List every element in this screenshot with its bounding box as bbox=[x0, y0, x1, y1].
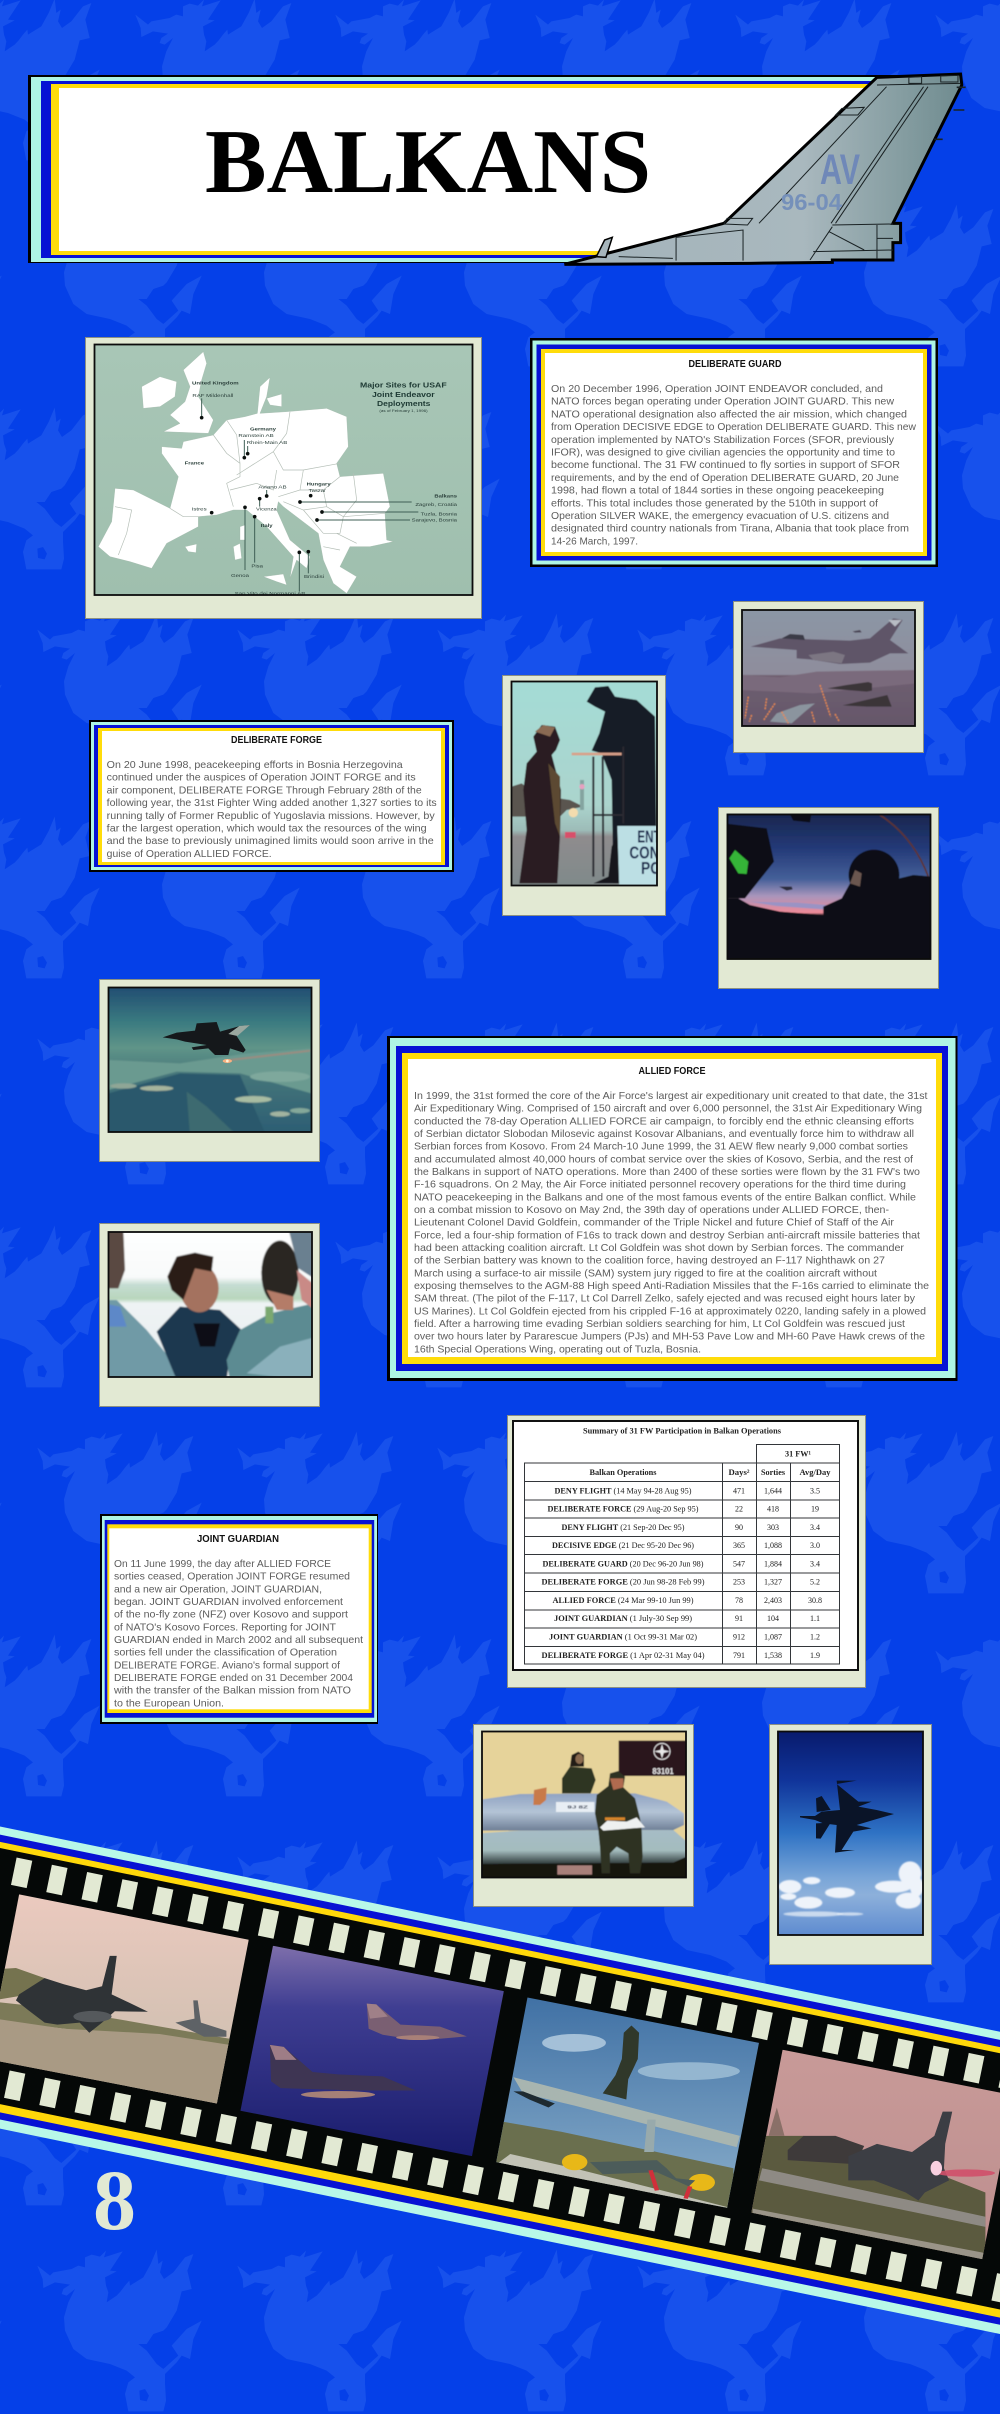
photo card: map of major USAF sites: Germany bbox=[250, 427, 276, 433]
text block: Deliberate Guard body: efforts. This total includes those generated by the 510th in support of bbox=[551, 498, 878, 509]
photo card: map of major USAF sites: Hungary bbox=[307, 481, 331, 487]
text block: Joint Guardian body: of the no-fly zone (NFZ) over Kosovo and support bbox=[114, 1610, 348, 1621]
text block: Deliberate Forge body: continued under the auspices of Operation JOINT FORGE and its bbox=[107, 773, 416, 784]
photo card: F-16 over clouds bbox=[770, 1724, 932, 1964]
table rows: 30.8 bbox=[808, 1596, 822, 1605]
table rows: 912 bbox=[733, 1632, 745, 1641]
table rows: 791 bbox=[733, 1651, 745, 1660]
text block: Deliberate Guard body: requirements, and by the end of Operation DELIBERATE GUARD, 20 June bbox=[551, 473, 899, 484]
text block: Deliberate Forge body: far the largest operation, which would tax the resources of the wing bbox=[107, 824, 427, 834]
text block: Deliberate Guard body: On 20 December 1996, Operation JOINT ENDEAVOR concluded, and bbox=[551, 384, 883, 395]
text block: Joint Guardian body: On 11 June 1999, the day after ALLIED FORCE bbox=[114, 1559, 331, 1570]
table rows: DECISIVE EDGE (21 Dec 95-20 Dec 96) bbox=[552, 1541, 694, 1550]
text block: Allied Force body: March using a surface-to air missile (SAM) system jury rigged to fire at the coalition aircraft without bbox=[414, 1268, 877, 1279]
table rows: 471 bbox=[733, 1486, 745, 1495]
table header: Sorties bbox=[761, 1468, 785, 1477]
table rows bbox=[542, 1486, 822, 1660]
table rows: 418 bbox=[767, 1505, 779, 1514]
film frames bbox=[0, 1889, 1000, 2265]
photo card: map of major USAF sites: Istres bbox=[192, 506, 207, 512]
table rows: JOINT GUARDIAN (1 Oct 99-31 Mar 02) bbox=[549, 1632, 697, 1641]
text block: Allied Force body: 16th Special Operations Wing, operating out of Tuzla, Bosnia. bbox=[414, 1344, 701, 1355]
table rows: 3.4 bbox=[810, 1523, 820, 1532]
text block: Deliberate Guard body: NATO operational designation also affected the air mission, which changed bbox=[551, 409, 907, 420]
text block: Allied Force body bbox=[414, 1091, 929, 1355]
table rows: 1,644 bbox=[764, 1486, 782, 1495]
table rows: DELIBERATE FORGE (1 Apr 02-31 May 04) bbox=[542, 1651, 705, 1660]
text block: Allied Force body: Serbian forces from Kosovo. From 24 March-10 June 1999, the 31 AEW flew nearly 9,000 combat sorties bbox=[414, 1142, 908, 1153]
table rows: 547 bbox=[733, 1559, 745, 1568]
table rows: 1.9 bbox=[810, 1651, 820, 1660]
text block: Allied Force body: over two hours later by Pararescue Jumpers (PJs) and MH-53 Pave Low and MH-60 Pave Hawk crews of the bbox=[414, 1332, 925, 1343]
text block: Allied Force body: In 1999, the 31st formed the core of the Air Force's largest air expeditionary unit created to that date, the 31st bbox=[414, 1091, 928, 1102]
table rows: 91 bbox=[735, 1614, 743, 1623]
text block: Deliberate Guard body: designated third country nationals from Tirana, Albania that took place from bbox=[551, 524, 909, 535]
title banner bbox=[28, 75, 898, 263]
photo card: map of major USAF sites: Taszar bbox=[309, 488, 326, 494]
film frame: crew on wing with missiles bbox=[491, 1994, 765, 2213]
table rows: DELIBERATE GUARD (20 Dec 96-20 Jun 98) bbox=[542, 1559, 704, 1568]
table header bbox=[590, 1450, 830, 1477]
photo card: soldiers on fuel tanks bbox=[474, 1724, 694, 1906]
table rows: 2,403 bbox=[764, 1596, 782, 1605]
text block: Allied Force body: field. After a harrowing time evading Serbian soldiers searching for him, Lt Col Goldfein was rescued just bbox=[414, 1319, 905, 1330]
table rows: 3.4 bbox=[810, 1559, 820, 1568]
film frame: F-16 taking off with afterburner bbox=[746, 2047, 1000, 2265]
photo card: map of major USAF sites: Italy bbox=[261, 523, 273, 529]
text block: Joint Guardian body: with the transfer of the Balkan mission from NATO bbox=[113, 1686, 351, 1697]
text block: Allied Force body: had been attacking coalition aircraft. Lt Col Goldfein was shot down by Serbian forces. The commander bbox=[414, 1243, 905, 1254]
photo card: map of major USAF sites: Pisa bbox=[251, 563, 263, 569]
photo card: map of major USAF sites: Balkans bbox=[434, 493, 457, 499]
icon: F-16 tail fin: 96-04 bbox=[781, 189, 842, 215]
table rows: 1.2 bbox=[810, 1632, 820, 1641]
film frame: two F-16s in flight bbox=[236, 1942, 510, 2160]
table rows: 3.0 bbox=[810, 1541, 820, 1550]
film frame: F-16 on the ramp bbox=[0, 1889, 255, 2108]
table rows: 1,087 bbox=[764, 1632, 782, 1641]
text block: Allied Force body: Lieutenant Colonel David Goldfein, commander of the Triple Nickel and future Chief of Staff of the Air bbox=[414, 1218, 895, 1229]
text block: Joint Guardian body: to the European Union. bbox=[114, 1698, 224, 1709]
table rows: 19 bbox=[811, 1505, 819, 1514]
page number: 8 bbox=[93, 2152, 136, 2248]
table header: 31 FW¹ bbox=[785, 1450, 812, 1458]
icon: F-16 tail fin bbox=[564, 74, 966, 264]
text block: Allied Force body: Air Expeditionary Wing. Comprised of 150 aircraft and over 6,000 personnel, the 31st Air Expeditionary Wing bbox=[414, 1104, 922, 1115]
text block: Deliberate Forge body: guise of Operation ALLIED FORCE. bbox=[107, 849, 272, 860]
photo card: map of major USAF sites: Rhein-Main AB bbox=[247, 440, 288, 446]
heading: Deliberate Forge: DELIBERATE FORGE bbox=[231, 734, 322, 746]
photo card: map of major USAF sites: Sarajevo, Bosnia bbox=[412, 518, 457, 524]
photo card: soldiers on fuel tanks: 9J 8Z bbox=[567, 1805, 588, 1811]
photo card: crew at the stand: PO bbox=[641, 858, 661, 878]
text block: Deliberate Guard body: operation implemented by NATO's Stabilization Forces (SFOR, previously bbox=[551, 435, 895, 446]
table rows: 3.5 bbox=[810, 1486, 820, 1495]
panel: Deliberate Forge bbox=[89, 720, 454, 872]
table rows: DELIBERATE FORGE (20 Jun 98-28 Feb 99) bbox=[542, 1578, 705, 1587]
text block: Deliberate Guard body: NATO forces began operating under Operation JOINT GUARD. This new bbox=[551, 397, 895, 408]
table rows: 104 bbox=[767, 1614, 779, 1623]
panel: Deliberate Guard bbox=[530, 338, 938, 567]
table rows: 22 bbox=[735, 1505, 743, 1514]
photo card: map of major USAF sites: Vicenza bbox=[256, 507, 277, 513]
table rows: DENY FLIGHT (21 Sep-20 Dec 95) bbox=[562, 1523, 685, 1532]
text block: Allied Force body: of the Serbian battery was known to the coalition force, having destroyed an F-117 Nighthawk on 27 bbox=[414, 1256, 885, 1267]
table rows: DELIBERATE FORCE (29 Aug-20 Sep 95) bbox=[548, 1505, 699, 1514]
photo card: map of major USAF sites: Tuzla, Bosnia bbox=[421, 511, 457, 517]
photo card: map of major USAF sites: Genoa bbox=[231, 573, 249, 579]
text block: Allied Force body: and accumulated almost 40,000 hours of combat service over the skies of Kosovo, Serbia, and the rest of bbox=[414, 1154, 913, 1165]
photo card: map of major USAF sites: France bbox=[185, 460, 204, 466]
photo card: map of major USAF sites: United Kingdom bbox=[192, 380, 239, 386]
heading: BALKANS: BALKANS bbox=[205, 111, 651, 212]
table title: Summary of 31 FW Participation in Balkan Operations bbox=[583, 1426, 781, 1436]
table rows: 78 bbox=[735, 1596, 743, 1605]
photo card: F-16 dropping bombs bbox=[734, 602, 924, 752]
table rows: 303 bbox=[767, 1523, 779, 1532]
text block: Deliberate Guard body: IFOR), was designed to give civilian agencies the opportunity and time to bbox=[551, 448, 895, 458]
photo card: map of major USAF sites: (as of February 1, 1996) bbox=[379, 409, 428, 413]
text block: Allied Force body: NATO peacekeeping in the Balkans and one of the most famous events of the entire Balkan conflict. While bbox=[414, 1192, 916, 1203]
photo card: map of major USAF sites: Major Sites for USAF bbox=[360, 381, 447, 390]
table rows: 5.2 bbox=[810, 1578, 820, 1587]
photo card: map of major USAF sites: San Vito dei Normanni AB bbox=[235, 591, 306, 597]
text block: Deliberate Guard body: 1998, had flown a total of 1844 sorties in these ongoing peacekeeping bbox=[551, 486, 884, 497]
text block: Deliberate Guard body: Operation SILVER WAKE, the emergency evacuation of U.S. citizens and bbox=[551, 511, 889, 522]
photo card: crew at the stand bbox=[502, 676, 666, 916]
text block: Joint Guardian body: and a new air Operation, JOINT GUARDIAN, bbox=[114, 1584, 322, 1595]
table header: Avg/Day bbox=[800, 1468, 830, 1477]
text block: Joint Guardian body: sorties fell under the classification of Operation bbox=[114, 1648, 337, 1659]
text block: Deliberate Forge body bbox=[107, 760, 437, 860]
text block: Deliberate Guard body: 14-26 March, 1997. bbox=[551, 536, 638, 547]
table rows: JOINT GUARDIAN (1 July-30 Sep 99) bbox=[554, 1614, 692, 1623]
text block: Joint Guardian body: of NATO's Kosovo Forces. Reporting for JOINT bbox=[114, 1622, 337, 1633]
text block: Joint Guardian body: began. JOINT GUARDIAN involved enforcement bbox=[114, 1597, 343, 1608]
text block: Allied Force body: exposing themselves to the AGM-88 High speed Anti-Radiation Missiles that the F-16s carried to eliminate the bbox=[414, 1281, 929, 1292]
text block: Deliberate Forge body: and the base to previously unimagined limits would soon arrive in the bbox=[107, 836, 434, 847]
text block: Joint Guardian body bbox=[113, 1559, 363, 1709]
photo card: soldiers on fuel tanks: 83101 bbox=[652, 1767, 674, 1776]
table rows: 1,538 bbox=[764, 1651, 782, 1660]
panel: Allied Force bbox=[387, 1036, 958, 1381]
text block: Deliberate Forge body: running tally of Former Republic of Yugoslavia missions. However, by bbox=[107, 811, 436, 822]
text block: Joint Guardian body: GUARDIAN ended in March 2002 and all subsequent bbox=[114, 1635, 363, 1646]
heading: Allied Force: ALLIED FORCE bbox=[638, 1065, 706, 1077]
table header: Balkan Operations bbox=[590, 1468, 656, 1477]
photo card: crew at the stand: ENT bbox=[637, 827, 661, 847]
photo card: map of major USAF sites: Ramstein AB bbox=[238, 433, 274, 439]
text block: Deliberate Forge body: On 20 June 1998, peacekeeping efforts in Bosnia Herzegovina bbox=[107, 760, 403, 771]
text block: Allied Force body: of Serbian dictator Slobodan Milosevic against Kosovar Albanians, and eventually force him to withdraw all bbox=[414, 1129, 914, 1140]
table rows: 90 bbox=[735, 1523, 743, 1532]
text block: Allied Force body: the Balkans in support of NATO operations. More than 2400 of these sorties were flown by the 31 FW's two bbox=[414, 1167, 920, 1178]
text block: Deliberate Guard body: from Operation DECISIVE EDGE to Operation DELIBERATE GUARD. This new bbox=[551, 422, 917, 433]
text block: Deliberate Forge body: following year, the 31st Fighter Wing added another 1,327 sorties to its bbox=[107, 798, 437, 809]
photo card: map of major USAF sites: Joint Endeavor bbox=[372, 390, 435, 399]
text block: Deliberate Forge body: air component, DELIBERATE FORGE Through February 28th of the bbox=[107, 785, 422, 796]
table rows: 1,884 bbox=[764, 1559, 782, 1568]
text block: Allied Force body: F-16 squadrons. On 2 May, the Air Force initiated personnel recovery operations for the third time during bbox=[414, 1180, 906, 1191]
table rows: DENY FLIGHT (14 May 94-28 Aug 95) bbox=[554, 1486, 692, 1495]
text block: Joint Guardian body: sorties ceased, Operation JOINT FORGE resumed bbox=[114, 1572, 350, 1583]
photo card: cockpit at dusk bbox=[718, 808, 938, 988]
icon: F-16 tail fin: AV bbox=[820, 146, 860, 194]
heading: Deliberate Guard: DELIBERATE GUARD bbox=[688, 358, 782, 370]
text block: Allied Force body: on a combat mission to Kosovo on May 2nd, the 39th day of operations under ALLIED FORCE, then- bbox=[414, 1205, 889, 1216]
photo card: map of major USAF sites: Zagreb, Croatia bbox=[415, 502, 457, 508]
text block: Joint Guardian body: DELIBERATE FORGE ended on 31 December 2004 bbox=[114, 1673, 353, 1684]
text block: Allied Force body: conducted the 78-day Operation ALLIED FORCE air campaign, to forcibly end the ethnic cleansing efforts bbox=[414, 1116, 914, 1127]
photo card: map of major USAF sites: Aviano AB bbox=[258, 484, 287, 490]
table rows: 1.1 bbox=[810, 1614, 820, 1623]
photo card: map of major USAF sites: Deployments bbox=[377, 399, 430, 408]
photo card: F-16 releasing flare bbox=[100, 980, 320, 1162]
table rows: 253 bbox=[733, 1578, 745, 1587]
table grid bbox=[524, 1444, 840, 1664]
film strip bbox=[0, 1800, 1000, 2356]
text block: Allied Force body: Force, led a four-ship formation of F16s to track down and destroy Serbian anti-aircraft missile batteries that bbox=[414, 1230, 920, 1241]
table rows: 1,327 bbox=[764, 1578, 782, 1587]
text block: Allied Force body: US Marines). Lt Col Goldfein ejected from his crippled F-16 at approximately 0220, landing safely in a plowed bbox=[414, 1306, 926, 1317]
table rows: 365 bbox=[733, 1541, 745, 1550]
text block: Deliberate Guard body: become functional. The 31 FW continued to fly sorties in support of SFOR bbox=[551, 460, 900, 471]
photo card: map of major USAF sites: Brindisi bbox=[304, 574, 324, 580]
photo card: map of major USAF sites bbox=[86, 338, 482, 618]
photo card: map of major USAF sites: RAF Mildenhall bbox=[192, 393, 233, 399]
table header: Days² bbox=[728, 1468, 750, 1477]
text block: Allied Force body: SAM threat. (The pilot of the F-117, Lt Col Darrell Zelko, safely ejected and was recused eight hours later by bbox=[414, 1294, 916, 1305]
heading: Joint Guardian: JOINT GUARDIAN bbox=[197, 1533, 279, 1545]
photo card: crew at the stand: CON bbox=[629, 842, 659, 862]
text block: Joint Guardian body: DELIBERATE FORGE. Aviano's formal support of bbox=[114, 1660, 340, 1671]
text block: Deliberate Guard body bbox=[551, 384, 917, 547]
photo card: pilot with colleagues bbox=[100, 1224, 320, 1406]
panel: Joint Guardian bbox=[100, 1514, 378, 1724]
table rows: 1,088 bbox=[764, 1541, 782, 1550]
table rows: ALLIED FORCE (24 Mar 99-10 Jun 99) bbox=[552, 1596, 694, 1605]
table card: Summary of 31 FW participation bbox=[508, 1416, 866, 1688]
